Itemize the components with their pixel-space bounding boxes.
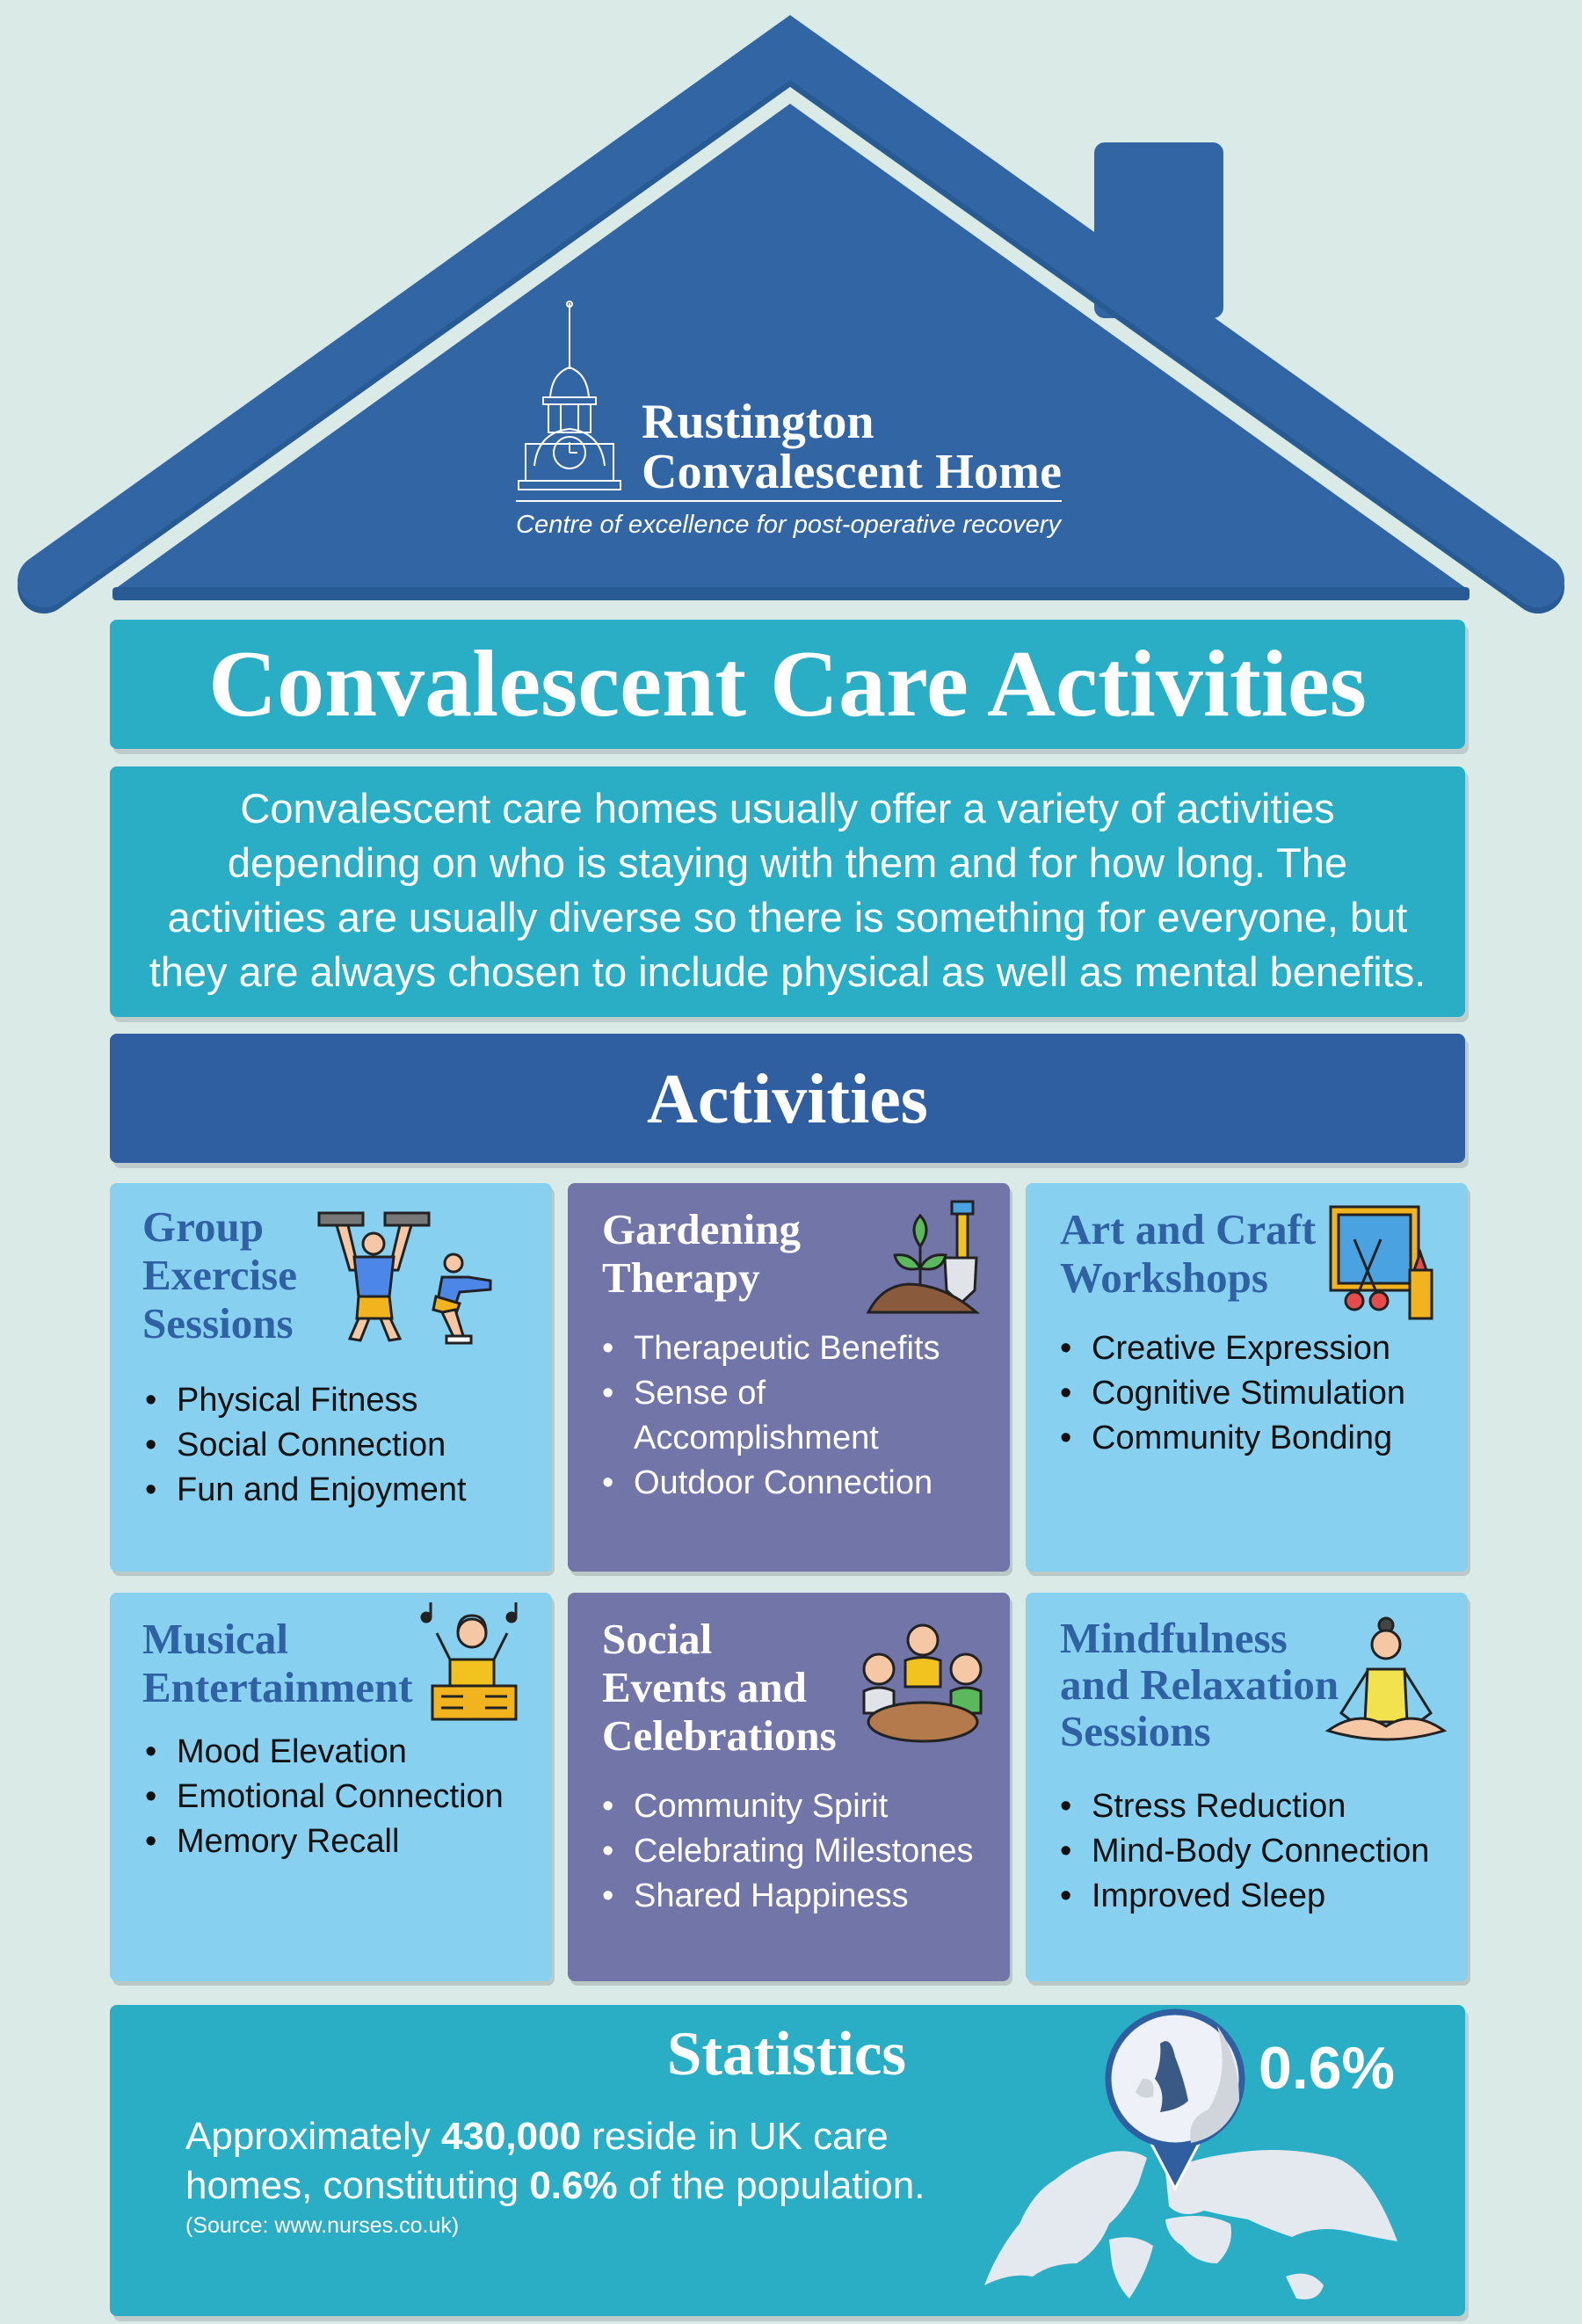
pin (1108, 2012, 1242, 2189)
heading: Gardening (602, 1205, 801, 1253)
bullets: Memory Recall (177, 1823, 399, 1860)
heading (1060, 1205, 1316, 1302)
bullets (1062, 1330, 1405, 1456)
intro text: activities are usually diverse so there is something for everyone, but (168, 894, 1407, 940)
statistics heading: Statistics (667, 2020, 906, 2088)
bullets (1062, 1788, 1429, 1914)
bullets: Therapeutic Benefits (634, 1330, 940, 1367)
intro text: Convalescent care homes usually offer a variety of activities (240, 785, 1335, 832)
card: mindfulness (1026, 1593, 1468, 1981)
title: Convalescent Care Activities (208, 632, 1367, 737)
heading (602, 1205, 801, 1302)
bullets: Celebrating Milestones (634, 1833, 974, 1870)
card: art and craft (1026, 1183, 1468, 1572)
statistics text: Approximately 430,000 reside in UK care (185, 2115, 889, 2158)
heading: Mindfulness (1060, 1614, 1288, 1662)
intro text: depending on who is staying with them and for how long. The (228, 839, 1347, 886)
bullets: Mood Elevation (177, 1733, 407, 1770)
bullets (603, 1330, 940, 1501)
house gable (112, 104, 1470, 600)
chimney (1094, 142, 1223, 318)
card: group exercise (110, 1183, 552, 1572)
world map with pin (984, 2009, 1397, 2299)
intro text: they are always chosen to include physical as well as mental benefits. (149, 948, 1426, 995)
bullets: Physical Fitness (177, 1382, 418, 1419)
heading: Art and Craft (1060, 1205, 1316, 1253)
intro band (110, 766, 1465, 1017)
card: gardening therapy (568, 1183, 1010, 1572)
logo: clock tower (519, 301, 620, 490)
heading: Social (602, 1615, 712, 1663)
bullets: Improved Sleep (1092, 1877, 1325, 1914)
bullets (146, 1382, 467, 1508)
logo: name: Rustington (642, 395, 874, 449)
heading: Group (142, 1202, 264, 1251)
bullets (603, 1788, 974, 1914)
bullets: Fun and Enjoyment (177, 1471, 467, 1508)
heading (1060, 1614, 1339, 1755)
heading: Entertainment (142, 1663, 413, 1711)
stat: 0.6%: 0.6% (1259, 2035, 1395, 2102)
heading: Events and (602, 1663, 807, 1711)
card: musical entertainment (110, 1593, 552, 1981)
statistics text (185, 2115, 925, 2238)
bullets (146, 1733, 504, 1860)
logo: name (516, 395, 1062, 539)
roof and house top (18, 15, 1564, 614)
icon: art (1329, 1206, 1433, 1320)
bullets: Community Spirit (634, 1788, 888, 1825)
bullets: Outdoor Connection (634, 1464, 933, 1501)
logo: name: Convalescent Home (642, 445, 1062, 499)
heading (602, 1615, 837, 1760)
heading: Musical (142, 1615, 288, 1663)
icon: yoga (1325, 1617, 1447, 1740)
bullets: Emotional Connection (177, 1778, 504, 1815)
bullets: Social Connection (177, 1427, 446, 1463)
heading: Therapy (602, 1253, 760, 1302)
statistics text: (Source: www.nurses.co.uk) (185, 2213, 459, 2238)
icon: music (420, 1602, 517, 1721)
heading: Sessions (142, 1299, 294, 1347)
heading: Celebrations (602, 1711, 837, 1760)
icon: gardening (867, 1201, 980, 1313)
intro text (149, 785, 1426, 995)
title band (110, 620, 1465, 749)
bullets: Community Bonding (1092, 1420, 1392, 1456)
roof band (44, 47, 1538, 587)
heading: Exercise (142, 1251, 297, 1299)
bullets: Cognitive Stimulation (1092, 1375, 1405, 1412)
heading (142, 1615, 413, 1711)
logo: name: Centre of excellence for post-operative recovery (516, 511, 1062, 539)
icon: exercise (318, 1211, 492, 1345)
bullets: Stress Reduction (1092, 1788, 1346, 1825)
heading: Sessions (1060, 1707, 1211, 1755)
bullets: Creative Expression (1092, 1330, 1390, 1367)
bullets: Shared Happiness (634, 1877, 909, 1914)
icon: social (863, 1624, 983, 1742)
heading: and Relaxation (1060, 1660, 1339, 1709)
bullets: Accomplishment (634, 1420, 879, 1456)
statistics text: homes, constituting 0.6% of the population. (185, 2164, 925, 2207)
bullets: Sense of (634, 1375, 766, 1412)
activities heading: Activities (647, 1061, 928, 1138)
heading: Workshops (1060, 1253, 1268, 1302)
activities header (110, 1034, 1465, 1163)
heading (142, 1202, 297, 1347)
card: social events (568, 1593, 1010, 1981)
bullets: Mind-Body Connection (1092, 1833, 1429, 1870)
panel: statistics (110, 2005, 1465, 2316)
